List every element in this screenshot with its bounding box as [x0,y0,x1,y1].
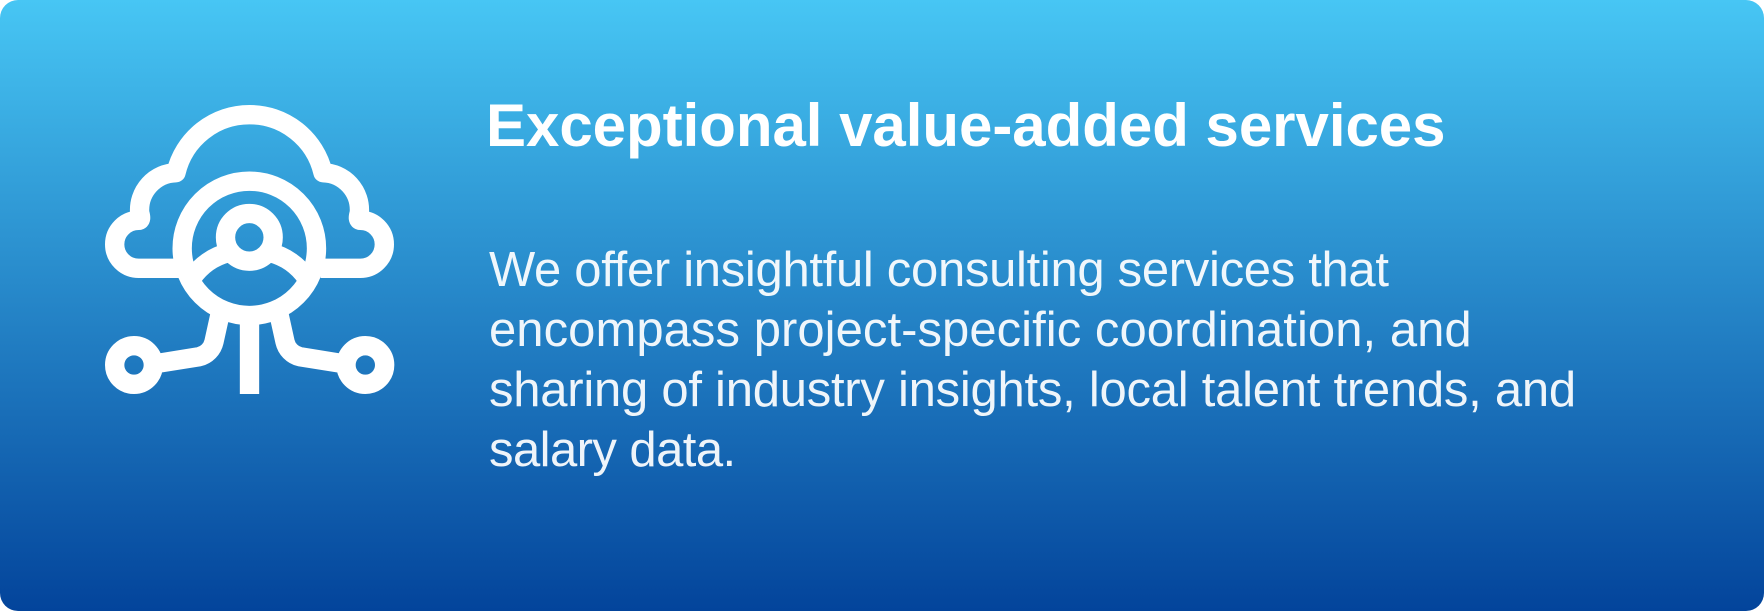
icon part: left branch [160,316,220,363]
text block: description: salary data. [489,423,736,477]
icon part: person shoulders [192,253,307,278]
icon part: person head [226,214,273,261]
text block: description: sharing of industry insights, local talent trends, and [489,363,1576,417]
icon part: cloud outline [115,115,384,268]
text block: description: encompass project-specific coordination, and [489,303,1472,357]
text block: description: We offer insightful consulting services that [489,243,1389,297]
text block: description [489,243,1576,477]
icon: cloud with person and network nodes [105,105,394,394]
heading: Exceptional value-added services [486,92,1445,159]
icon part: magnifier ring [182,181,316,316]
icon part: right node [346,346,385,384]
icon part: right branch [279,316,339,363]
icon part: left node [115,346,153,384]
icon part: centre stem [220,323,278,394]
